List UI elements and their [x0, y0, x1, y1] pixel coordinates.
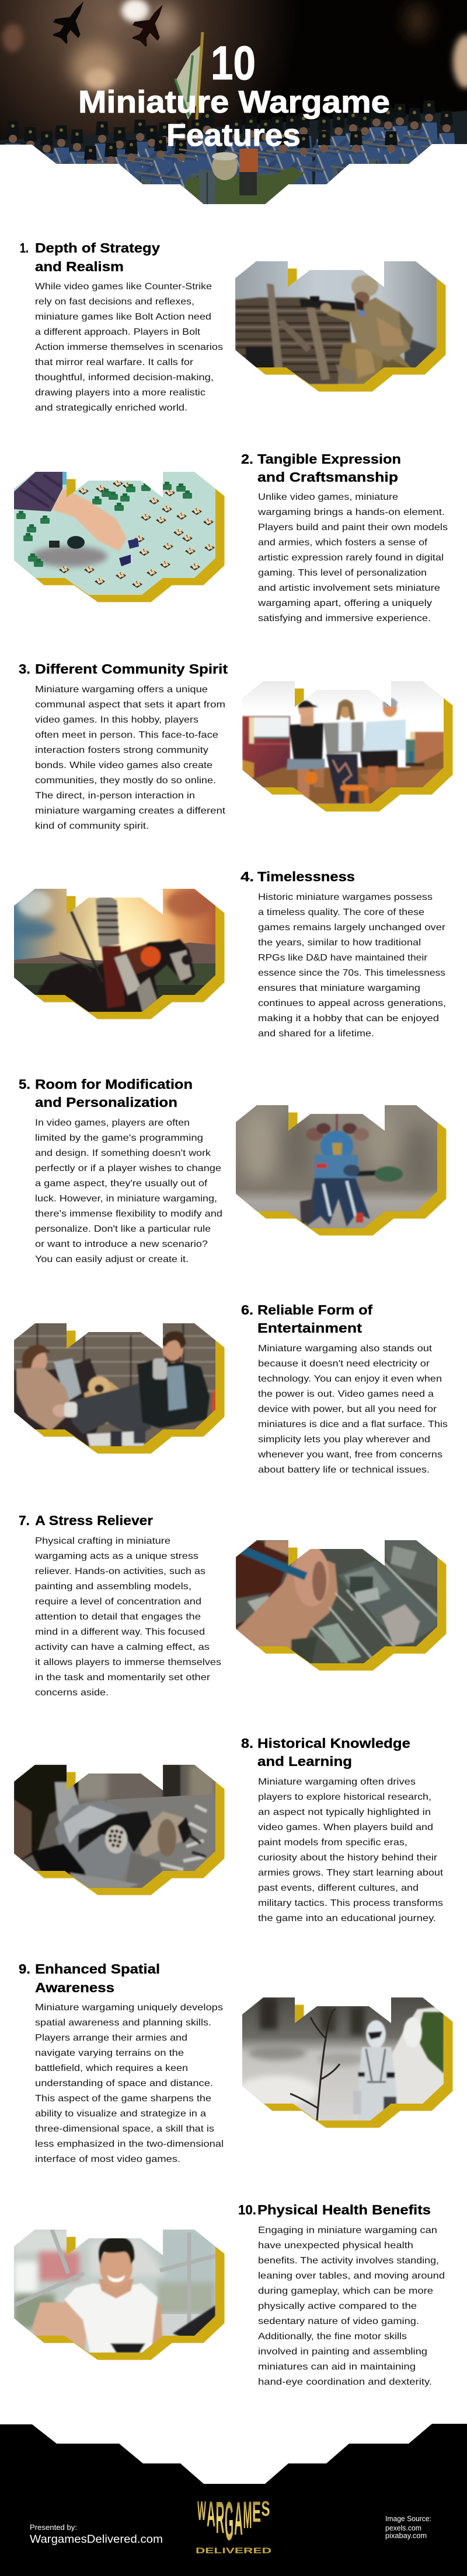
body text: in the task and momentarily set other	[35, 1673, 211, 1683]
heading: and Realism	[35, 259, 124, 274]
heading: 1.	[20, 240, 29, 255]
heading: and Learning	[257, 1754, 352, 1769]
heading: Historical Knowledge	[257, 1736, 410, 1751]
body text	[35, 2003, 224, 2164]
body text	[34, 1536, 221, 1698]
heading: 2.	[241, 451, 253, 467]
body text: satisfying and immersive experience.	[258, 614, 431, 623]
body text: an aspect not typically highlighted in	[258, 1807, 431, 1817]
panel: 5 room for modification and personalization	[19, 1077, 446, 1264]
body text: technology. You can enjoy it even when	[258, 1374, 442, 1384]
body text: ability to visualize and strategize in a	[35, 2109, 206, 2119]
heading: and Personalization	[35, 1095, 177, 1110]
body text: Engaging in miniature wargaming can	[258, 2225, 437, 2235]
logo: wargames delivered	[196, 2491, 271, 2555]
body text: whenever you want, free from concerns	[257, 1450, 442, 1460]
body text: personalize. Don't like a particular rule	[35, 1224, 211, 1234]
body text: continues to appeal across generations,	[258, 998, 446, 1008]
body text: less emphasized in the two-dimensional	[35, 2139, 224, 2149]
body text	[258, 2225, 445, 2387]
heading: Tangible Expression	[257, 451, 401, 467]
presented by: WargamesDelivered.com	[30, 2533, 163, 2546]
body text: video games. When players build and	[258, 1823, 433, 1832]
body text: understanding of space and distance.	[35, 2079, 213, 2088]
body text: during gameplay, which can be more	[258, 2286, 433, 2296]
flag	[175, 32, 203, 120]
body text: artistic expression rarely found in digital	[258, 553, 444, 563]
body text: reliever. Hands-on activities, such as	[35, 1566, 205, 1576]
body text	[35, 282, 223, 413]
body text: communal aspect that sets it apart from	[35, 700, 225, 710]
body text: kind of community spirit.	[35, 821, 149, 831]
body text: the game into an educational journey.	[258, 1913, 436, 1923]
body text	[257, 1344, 448, 1475]
body text: paint models from specific eras,	[258, 1838, 407, 1848]
body text: Physical crafting in miniature	[35, 1536, 170, 1546]
panel: 3 different community spirit	[19, 661, 453, 831]
heading	[19, 1077, 193, 1110]
heading: 5.	[19, 1077, 30, 1092]
title: Features	[166, 118, 301, 153]
body text: or want to introduce a new scenario?	[35, 1239, 208, 1249]
body text: three-dimensional space, a skill that is	[35, 2124, 214, 2134]
body text: spatial awareness and planning skills.	[35, 2018, 211, 2028]
presented by	[30, 2523, 163, 2546]
body text: While video games like Counter-Strike	[35, 282, 212, 292]
body text: and strategically enriched world.	[35, 403, 187, 413]
heading: 7.	[19, 1513, 30, 1528]
body text: thoughtful, informed decision-making,	[35, 373, 214, 383]
logo: wargames delivered: A	[234, 2492, 243, 2545]
body text: communities, they mostly do so online.	[35, 776, 216, 786]
logo: wargames delivered: R	[216, 2492, 225, 2542]
presented by: Presented by:	[30, 2523, 77, 2532]
logo: wargames delivered: DELIVERED	[196, 2546, 271, 2555]
body text: video games. In this hobby, players	[35, 715, 198, 725]
title	[78, 37, 390, 153]
body text: and shared for a lifetime.	[258, 1029, 374, 1039]
heading: Enhanced Spatial	[35, 1961, 160, 1976]
image source credits	[385, 2515, 431, 2540]
body text: the years, similar to how traditional	[258, 938, 421, 948]
heading	[241, 451, 401, 485]
heading: Reliable Form of	[257, 1302, 372, 1317]
body text: military tactics. This process transforms	[258, 1898, 443, 1908]
heading: Entertainment	[257, 1320, 362, 1336]
body text: and artistic involvement sets miniature	[258, 583, 440, 593]
body text	[258, 892, 446, 1039]
heading: 3.	[19, 661, 30, 677]
body text: often meet in person. This face-to-face	[35, 730, 218, 740]
icon: jet two	[132, 5, 163, 47]
body text: miniatures is dice and a flat surface. This	[258, 1420, 448, 1429]
body text: interface of most video games.	[35, 2154, 180, 2164]
body text: it allows players to immerse themselves	[35, 1657, 221, 1667]
panel: 7 a stress reliever	[19, 1513, 446, 1698]
body text	[257, 492, 448, 623]
body text: Unlike video games, miniature	[258, 492, 398, 502]
body text: Miniature wargaming often drives	[258, 1777, 416, 1787]
logo: wargames delivered: S	[262, 2497, 270, 2521]
body text: rely on fast decisions and reflexes,	[35, 297, 194, 307]
body text: miniature games like Bolt Action need	[35, 312, 211, 322]
body text: RPGs like D&D have maintained their	[258, 953, 428, 963]
panel: 2 tangible expression and craftsmanship	[14, 451, 448, 623]
heading: 10.	[238, 2202, 256, 2217]
heading: Depth of Strategy	[35, 240, 160, 255]
body text: Players arrange their armies and	[35, 2033, 187, 2043]
body text: wargaming apart, offering a uniquely	[257, 598, 432, 608]
heading: Different Community Spirit	[35, 661, 228, 677]
photo: knight helmet on rubble	[14, 1765, 224, 1895]
body text: painting and assembling models,	[35, 1582, 191, 1592]
panel: 8 historical knowledge and learning	[14, 1736, 444, 1923]
body text: that mirror real warfare. It calls for	[35, 358, 194, 367]
heading: Awareness	[35, 1980, 114, 1995]
body text: involved in painting and assembling	[258, 2347, 427, 2357]
image source credits: pexels.com	[385, 2524, 421, 2532]
photo: hand placing miniatures on table	[14, 472, 224, 602]
body text: In video games, players are often	[35, 1118, 190, 1128]
body text: players to explore historical research,	[258, 1792, 431, 1802]
panel: 10 physical health benefits	[14, 2202, 445, 2387]
panel: 6 reliable form of entertainment	[14, 1302, 448, 1475]
body text: leaning over tables, and moving around	[258, 2271, 445, 2281]
logo: wargames delivered: A	[207, 2494, 215, 2534]
clouds	[2, 0, 467, 92]
body text: interaction fosters strong community	[35, 745, 208, 755]
photo: smiling man in white t-shirt	[14, 2230, 224, 2360]
heading	[241, 1736, 410, 1769]
heading: 9.	[19, 1961, 30, 1976]
panel: 9 enhanced spatial awareness	[19, 1961, 453, 2164]
heading: A Stress Reliever	[35, 1513, 153, 1528]
heading	[241, 1302, 372, 1336]
body text: You can easily adjust or create it.	[35, 1254, 189, 1264]
photo: hand painting a model kit sprue	[236, 1540, 446, 1670]
heading: Physical Health Benefits	[257, 2202, 431, 2217]
body text: making it a hobby that can be enjoyed	[258, 1014, 439, 1024]
photo: painted blue fantasy miniature	[236, 1105, 446, 1235]
body text: and armies, which fosters a sense of	[258, 538, 428, 548]
body text: attention to detail that engages the	[35, 1612, 201, 1622]
body text: curiosity about the history behind their	[258, 1853, 438, 1863]
body text: navigate varying terrains on the	[35, 2048, 184, 2058]
body text: simplicity lets you play wherever and	[258, 1435, 430, 1445]
body text: activity can have a calming effect, as	[35, 1642, 210, 1652]
heading: 6.	[241, 1302, 253, 1317]
body text: Additionally, the fine motor skills	[258, 2332, 407, 2342]
photo: three friends sitting on a ledge	[242, 681, 453, 812]
body text: Miniature wargaming offers a unique	[35, 685, 208, 695]
body text: a game aspect, they're usually out of	[35, 1179, 208, 1189]
body text: Historic miniature wargames possess	[258, 892, 433, 902]
photo: armoured rider on horse at sunset	[8, 889, 224, 1019]
body text: The direct, in-person interaction in	[35, 791, 195, 801]
heading: Room for Modification	[35, 1077, 193, 1092]
body text: Miniature wargaming also stands out	[258, 1344, 433, 1354]
photo: stormtrooper figure in snowy forest	[236, 1997, 453, 2128]
body text: miniatures can aid in maintaining	[258, 2362, 416, 2372]
heading: 8.	[241, 1736, 253, 1751]
photo: couple with pug against wooden wall	[14, 1323, 224, 1453]
icon: jet one	[53, 2, 83, 44]
body text: essence since the 70s. This timelessness	[258, 968, 445, 978]
body text: and design. If something doesn't work	[35, 1148, 211, 1158]
logo: wargames delivered: M	[243, 2494, 252, 2537]
body text: Action immerse themselves in scenarios	[35, 342, 223, 352]
body text	[35, 685, 226, 831]
body text	[258, 1777, 444, 1923]
logo: wargames delivered: E	[252, 2497, 261, 2529]
body text: hand-eye coordination and dexterity.	[258, 2377, 432, 2387]
body text: miniature wargaming creates a different	[35, 806, 226, 816]
body text: luck. However, in miniature wargaming,	[35, 1194, 217, 1204]
heading: and Craftsmanship	[257, 469, 398, 485]
heading: 4.	[241, 869, 254, 884]
body text: This aspect of the game sharpens the	[35, 2094, 211, 2104]
body text: wargaming acts as a unique stress	[34, 1551, 198, 1561]
body text: about battery life or technical issues.	[258, 1465, 430, 1475]
body text: device with power, but all you need for	[258, 1404, 437, 1414]
body text: concerns aside.	[35, 1688, 109, 1698]
body text: past events, different cultures, and	[258, 1883, 419, 1893]
panel: 1 depth of strategy and realism	[20, 240, 446, 413]
body text: perfectly or if a player wishes to change	[35, 1163, 221, 1173]
body text: there's immense flexibility to modify and	[35, 1209, 222, 1219]
panel: 4 timelessness	[8, 869, 446, 1039]
logo: wargames delivered: W	[197, 2496, 206, 2526]
body text: Players build and paint their own models	[258, 523, 448, 532]
body text: wargaming brings a hands-on element.	[257, 507, 445, 517]
title: 10	[211, 37, 256, 90]
body text: Miniature wargaming uniquely develops	[35, 2003, 223, 2013]
logo: wargames delivered: G	[225, 2491, 234, 2552]
body text: a timeless quality. The core of these	[258, 907, 424, 917]
title: Miniature Wargame	[78, 85, 390, 120]
miniature soldiers	[0, 100, 467, 204]
image source credits: Image Source:	[385, 2515, 431, 2523]
body text: have unexpected physical health	[258, 2241, 413, 2251]
body text: physically active compared to the	[258, 2301, 417, 2311]
body text: drawing players into a more realistic	[35, 388, 205, 398]
body text: the power is out. Video games need a	[258, 1389, 434, 1399]
body text: bonds. While video games also create	[35, 760, 212, 770]
photo: soldier aiming behind barricade	[235, 261, 446, 392]
body text: sedentary nature of video gaming.	[258, 2316, 419, 2326]
image source credits: pixabay.com	[385, 2532, 427, 2540]
body text: armies grows. They start learning about	[258, 1868, 444, 1878]
body text	[35, 1118, 222, 1264]
body text: because it doesn't need electricity or	[258, 1359, 430, 1369]
body text: battlefield, which requires a keen	[35, 2063, 188, 2073]
body text: mind in a different way. This focused	[35, 1627, 205, 1637]
body text: benefits. The activity involves standing,	[258, 2256, 439, 2266]
body text: limited by the game's programming	[35, 1133, 203, 1143]
heading	[19, 1961, 160, 1995]
body text: games remains largely unchanged over	[258, 923, 446, 933]
footer band	[0, 2424, 467, 2576]
body text: gaming. This level of personalization	[258, 568, 427, 578]
heading	[20, 240, 160, 274]
body text: require a level of concentration and	[35, 1597, 201, 1607]
heading: Timelessness	[257, 869, 355, 884]
header banner with sky, jets and miniature soldiers	[0, 0, 467, 204]
body text: a different approach. Players in Bolt	[35, 327, 201, 337]
body text: ensures that miniature wargaming	[258, 983, 420, 993]
